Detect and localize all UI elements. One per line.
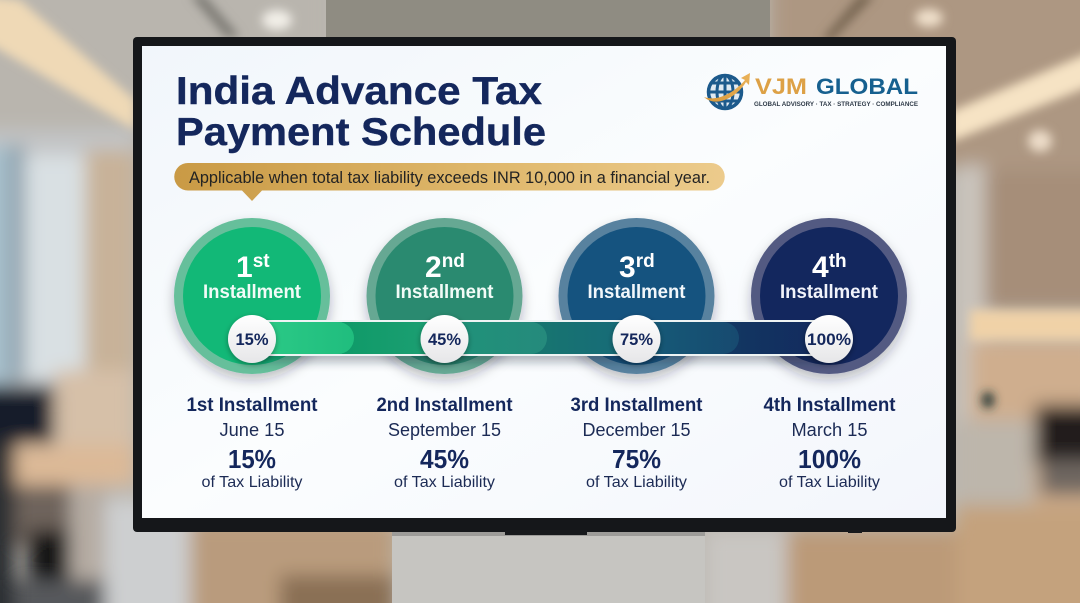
circle: 3rd installment: [558, 218, 714, 374]
circle: 2nd installment: nd: [442, 251, 465, 272]
details: 4th installment: 4th Installment: [764, 395, 896, 416]
details: 3rd installment: of Tax Liability: [586, 474, 687, 491]
details: 2nd installment: 2nd Installment: [376, 395, 513, 416]
details: 4th installment: 100%: [798, 444, 861, 474]
circle: 4th installment: 4: [812, 251, 829, 284]
details: 2nd installment: of Tax Liability: [394, 474, 495, 491]
marker: 15%: 15%: [235, 331, 269, 349]
wall monitor: [133, 37, 956, 535]
details: 3rd installment: December 15: [582, 420, 690, 440]
circle: 2nd installment: [366, 218, 522, 374]
circle: 4th installment: [751, 218, 907, 374]
circle: 1st installment: [174, 218, 330, 374]
circle: 4th installment: th: [829, 251, 847, 272]
details: 1st installment: 1st Installment: [186, 395, 318, 416]
circle: 2nd installment: Installment: [396, 282, 494, 303]
circle: 3rd installment: Installment: [588, 282, 686, 303]
details: 4th installment: [764, 395, 896, 491]
details: 3rd installment: 75%: [612, 444, 661, 474]
title: [176, 70, 546, 154]
circle: 1st installment: st: [253, 251, 270, 272]
marker: 75%: [612, 315, 660, 363]
logo: VJM Global: GLOBAL ADVISORY · TAX · STRATEGY · COMPLIANCE: [754, 101, 919, 108]
title: Payment Schedule: [176, 111, 546, 154]
marker: 100%: 100%: [807, 331, 851, 349]
details: 4th installment: of Tax Liability: [779, 474, 880, 491]
details: 1st installment: [186, 395, 318, 491]
details: 1st installment: June 15: [220, 420, 284, 440]
marker: 75%: 75%: [620, 331, 653, 349]
circle: 4th installment: Installment: [780, 282, 879, 303]
icon: globe with arrow: [704, 73, 750, 109]
circle: 3rd installment: 3: [619, 251, 636, 284]
marker: 45%: 45%: [428, 331, 461, 349]
callout: applicability pill: [174, 163, 725, 201]
details: 2nd installment: [376, 395, 513, 491]
marker: 15%: [228, 315, 276, 363]
circle: 1st installment: 1: [236, 251, 253, 284]
marker: 45%: [420, 315, 468, 363]
details: 3rd installment: [570, 395, 703, 491]
progress bar: [252, 320, 829, 362]
callout: applicability pill: Applicable when total tax liability exceeds INR 10,000 in a financial year.: [189, 169, 710, 187]
circle: 1st installment: Installment: [203, 282, 302, 303]
circle: 3rd installment: rd: [636, 251, 655, 272]
details: 2nd installment: 45%: [420, 444, 469, 474]
circle: 2nd installment: 2: [425, 251, 442, 284]
details: 3rd installment: 3rd Installment: [570, 395, 703, 416]
details: 1st installment: 15%: [228, 444, 276, 474]
details: 1st installment: of Tax Liability: [202, 474, 302, 491]
logo: VJM Global: [704, 73, 919, 109]
details: 2nd installment: September 15: [388, 420, 501, 440]
marker: 100%: [805, 315, 853, 363]
bar segments: [252, 322, 739, 354]
logo: VJM Global: VJM: [755, 74, 807, 99]
logo: VJM Global: GLOBAL: [816, 74, 918, 99]
details: 4th installment: March 15: [792, 420, 868, 440]
title: India Advance Tax: [176, 70, 542, 113]
